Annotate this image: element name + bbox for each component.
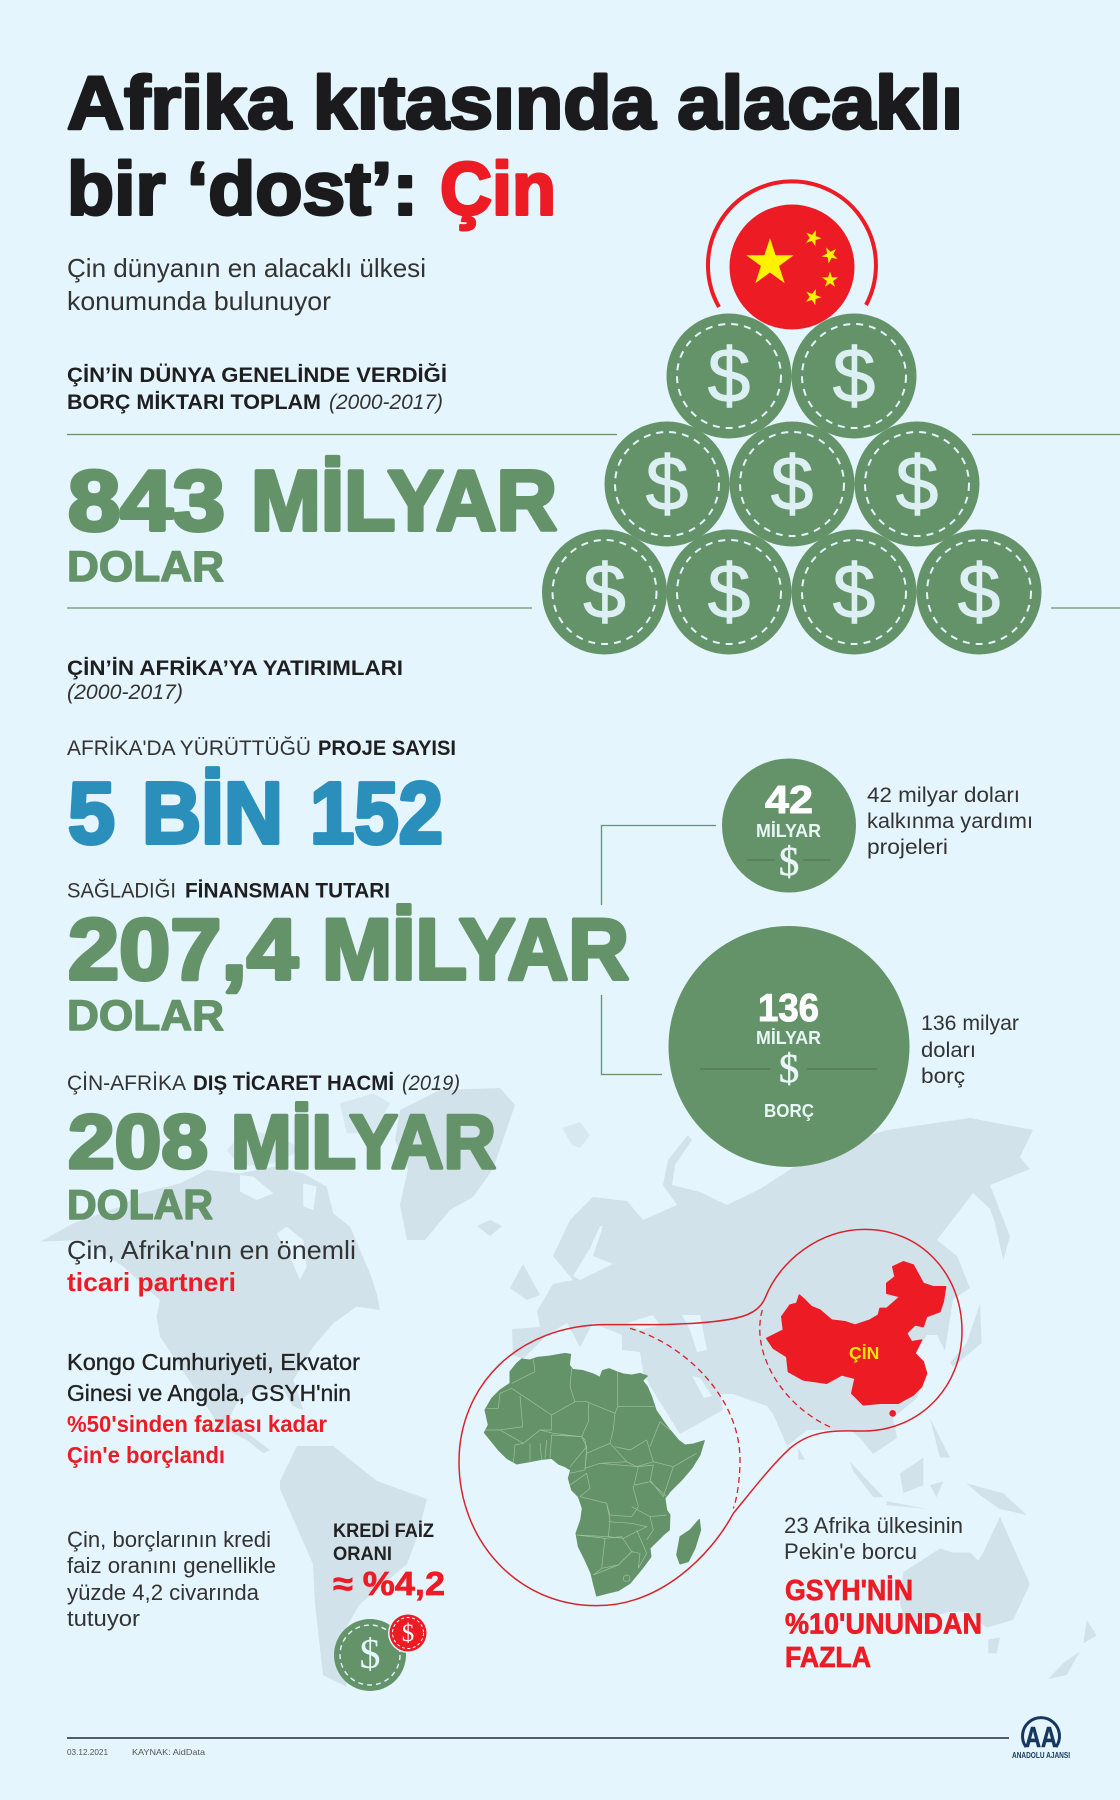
label: foreign trade volume: DIŞ TİCARET HACMİ [193, 1072, 394, 1095]
title: Afrika kıtasında alacaklı [67, 60, 963, 144]
label: financing amount: FİNANSMAN TUTARI [185, 880, 390, 902]
circle: 42 milyar [722, 758, 856, 892]
stat: 208 milyar dolar: MİLYAR [231, 1100, 496, 1185]
stat: 208 milyar dolar [67, 1100, 496, 1228]
heading: global lending total: (2000-2017) [329, 391, 443, 414]
Africa map [484, 1353, 704, 1596]
icon: pyramid of dollar coins: $ [708, 333, 750, 419]
text: credit interest rate: KREDİ FAİZ [333, 1521, 434, 1542]
title [67, 60, 963, 230]
icon: pyramid of dollar coins: $ [896, 441, 938, 527]
stat: 207,4 milyar dolar [67, 902, 629, 1040]
stat: 843 milyar dolar: 843 [68, 454, 225, 549]
stat: 843 milyar dolar: DOLAR [67, 543, 224, 591]
label: financing amount [67, 880, 390, 902]
background world map [40, 1088, 1097, 1687]
text: trade partner [67, 1235, 356, 1297]
text: 42 milyar description: projeleri [867, 835, 948, 859]
icon: interest coins: $ [402, 1620, 414, 1647]
icon: pyramid of dollar coins: $ [833, 549, 875, 635]
text: trade partner: Çin, Afrika'nın en önemli [67, 1235, 356, 1265]
stat: 5 bin 152: 152 [310, 765, 443, 862]
circle: 42 milyar: MİLYAR [756, 820, 821, 841]
label: foreign trade volume: ÇİN-AFRİKA [67, 1072, 186, 1095]
South America [280, 1446, 427, 1687]
circle: 42 milyar: $ [779, 838, 799, 884]
label: foreign trade volume [67, 1072, 460, 1095]
text: 136 milyar description: 136 milyar [921, 1011, 1019, 1035]
icon: pyramid of dollar coins: $ [771, 441, 813, 527]
heading: global lending total [67, 363, 447, 414]
subtitle: konumunda bulunuyor [67, 286, 331, 316]
text: Congo, Equatorial Guinea and Angola debt: %50'sinden fazlası kadar [67, 1411, 327, 1437]
stat: 208 milyar dolar: 208 [68, 1100, 208, 1185]
text: 23 African countries [784, 1513, 982, 1674]
icon: interest coins: $ [360, 1632, 380, 1678]
icon: Anadolu Ajansı logo [1012, 1718, 1070, 1760]
text: 23 African countries: Pekin'e borcu [784, 1539, 917, 1564]
text: 42 milyar description [867, 783, 1033, 859]
footer: date and source: KAYNAK: AidData [132, 1747, 205, 1757]
text: credit interest rate: ≈ %4,2 [333, 1565, 445, 1602]
text: Congo, Equatorial Guinea and Angola debt: Kongo Cumhuriyeti, Ekvator [67, 1349, 360, 1375]
text: 42 milyar description: 42 milyar doları [867, 783, 1020, 807]
map callout: Africa and China bubble [459, 1229, 962, 1606]
text: Congo, Equatorial Guinea and Angola debt: Çin'e borçlandı [67, 1442, 225, 1468]
icon: pyramid of dollar coins: $ [583, 549, 626, 635]
icon: pyramid of dollar coins: $ [708, 549, 750, 635]
circle: 42 milyar: 42 [765, 779, 813, 822]
text: interest rate description: faiz oranını genellikle [67, 1553, 276, 1578]
label: project count [67, 737, 456, 760]
icon: China flag circle [708, 181, 876, 330]
icon: pyramid of dollar coins: $ [958, 549, 1000, 635]
Greenland [395, 1088, 515, 1240]
circle: 136 milyar borç: BORÇ [764, 1100, 814, 1121]
icon: Anadolu Ajansı logo: ANADOLU AJANSI [1012, 1750, 1070, 1760]
stat: 5 bin 152 [68, 765, 443, 862]
stat: 207,4 milyar dolar: DOLAR [67, 992, 224, 1040]
title: bir ‘dost’: [67, 146, 418, 230]
text: interest rate description: Çin, borçlarının kredi [67, 1527, 271, 1552]
China map: ÇİN [849, 1343, 879, 1363]
text: interest rate description: yüzde 4,2 civarında [67, 1580, 260, 1605]
text: credit interest rate: ORANI [333, 1544, 392, 1565]
stat: 208 milyar dolar: DOLAR [67, 1181, 213, 1228]
stat: 5 bin 152: 5 [68, 765, 115, 862]
text: Congo, Equatorial Guinea and Angola debt [67, 1349, 360, 1468]
label: project count: AFRİKA'DA YÜRÜTTÜĞÜ [67, 737, 311, 760]
heading: global lending total: BORÇ MİKTARI TOPLAM [67, 391, 321, 414]
label: foreign trade volume: (2019) [402, 1072, 460, 1095]
text: 42 milyar description: kalkınma yardımı [867, 809, 1033, 833]
stat: 843 milyar dolar: MİLYAR [251, 454, 557, 549]
circle: 136 milyar borç: 136 [758, 987, 819, 1030]
label: project count: PROJE SAYISI [318, 737, 456, 760]
footer: date and source: 03.12.2021 [67, 1747, 108, 1757]
icon: pyramid of dollar coins: $ [833, 333, 875, 419]
text: credit interest rate [333, 1521, 445, 1602]
circle: 136 milyar borç [668, 926, 910, 1167]
text: 23 African countries: %10'UNUNDAN [785, 1608, 982, 1640]
circle: 136 milyar borç: MİLYAR [756, 1027, 821, 1048]
heading: China investment in Africa [67, 657, 403, 704]
red bubble outline [459, 1229, 962, 1606]
text: interest rate description [67, 1527, 276, 1631]
connector lines to breakdown circles [602, 826, 716, 1074]
text: 23 African countries: GSYH'NİN [785, 1575, 913, 1607]
title: Çin [440, 146, 556, 230]
text: 136 milyar description: doları [921, 1038, 976, 1062]
heading: China investment in Africa: ÇİN’İN AFRİKA’YA YATIRIMLARI [67, 657, 403, 680]
Eurasia [512, 1118, 1033, 1454]
stat: 5 bin 152: BİN [142, 765, 283, 862]
icon: interest coins [334, 1613, 428, 1691]
subtitle [67, 253, 426, 316]
heading: global lending total: ÇİN’İN DÜNYA GENELİNDE VERDİĞİ [67, 363, 447, 387]
heading: China investment in Africa: (2000-2017) [67, 681, 183, 704]
stat: 207,4 milyar dolar: 207,4 [68, 902, 298, 998]
text: trade partner: ticari partneri [67, 1267, 236, 1297]
circle: 136 milyar borç: $ [779, 1045, 799, 1091]
text: 23 African countries: 23 Afrika ülkesinin [784, 1513, 963, 1538]
stat: 207,4 milyar dolar: MİLYAR [322, 902, 629, 998]
text: 23 African countries: FAZLA [785, 1642, 871, 1674]
footer: date and source [67, 1738, 1009, 1757]
label: financing amount: SAĞLADIĞI [67, 880, 176, 902]
text: interest rate description: tutuyor [67, 1606, 140, 1631]
stat: 843 milyar dolar [67, 454, 557, 591]
China map [767, 1262, 946, 1417]
text: 136 milyar description [921, 1011, 1019, 1088]
icon: Anadolu Ajansı logo: AA [1025, 1722, 1057, 1754]
icon: pyramid of dollar coins: $ [646, 441, 688, 527]
text: 136 milyar description: borç [921, 1064, 965, 1088]
icon: pyramid of dollar coins [542, 314, 1042, 654]
subtitle: Çin dünyanın en alacaklı ülkesi [67, 253, 426, 283]
text: Congo, Equatorial Guinea and Angola debt: Ginesi ve Angola, GSYH'nin [67, 1380, 351, 1406]
